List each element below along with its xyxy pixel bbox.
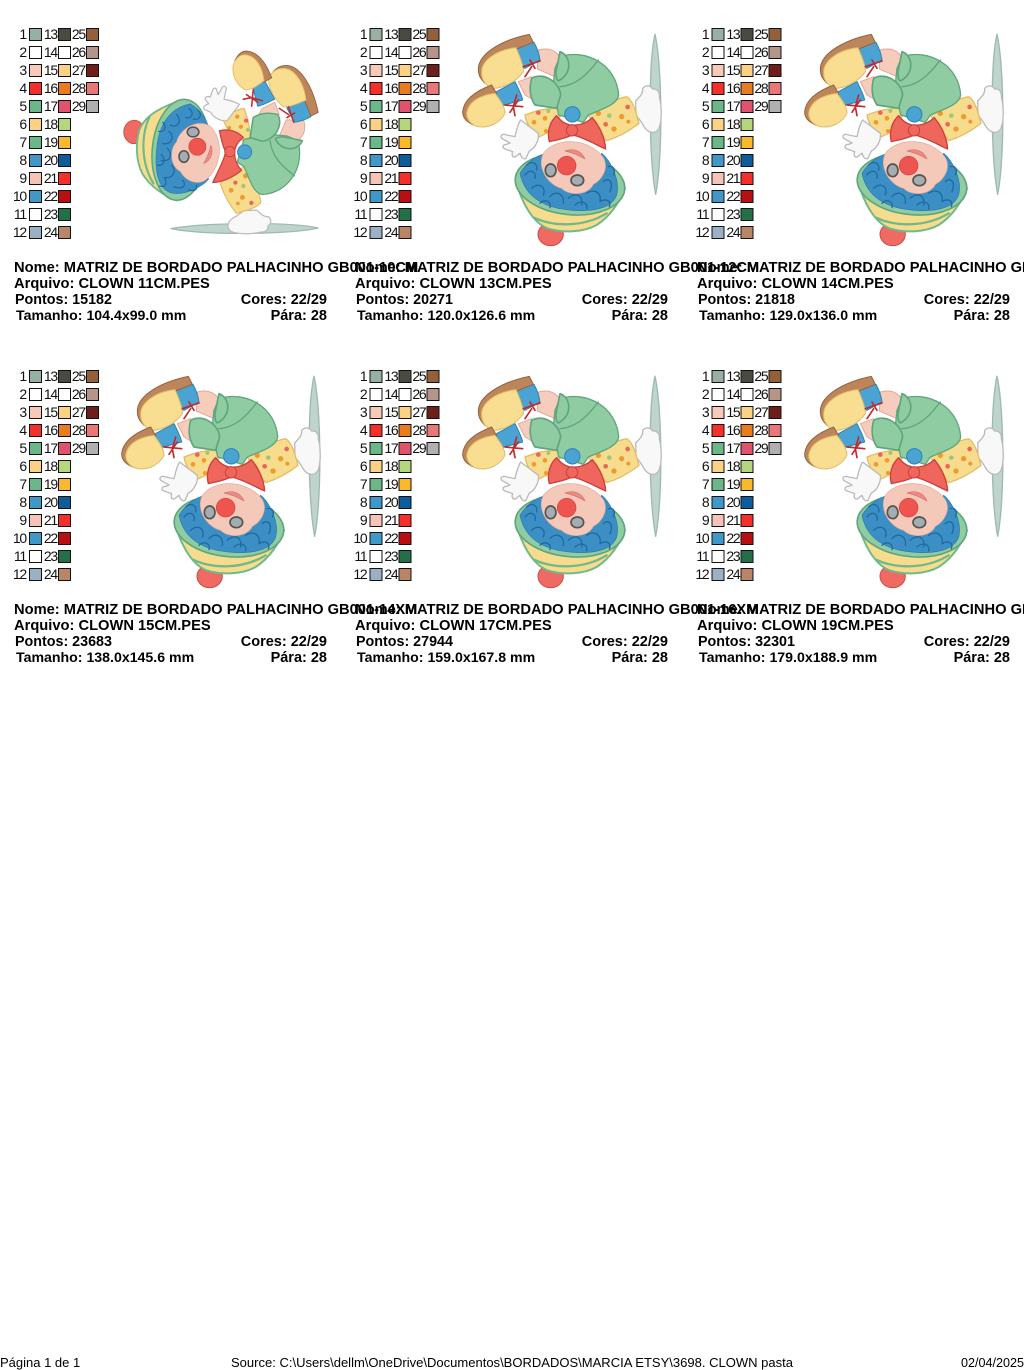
color legend: 9 [19, 512, 27, 528]
color legend: 27 [412, 404, 427, 420]
color legend [353, 368, 439, 582]
color legend: 2 [19, 44, 27, 60]
color legend: 17 [384, 440, 399, 456]
color legend: 29 [72, 98, 86, 114]
color legend [13, 26, 98, 240]
color legend: 23 [384, 206, 399, 222]
design info: Pontos: 27944 [356, 634, 453, 650]
color legend: 29 [72, 440, 86, 456]
color legend: 28 [412, 422, 427, 438]
design info: Nome: MATRIZ DE BORDADO PALHACINHO GB001-14XM [14, 602, 417, 618]
color legend [353, 26, 439, 240]
color legend: 2 [702, 44, 710, 60]
color legend: 20 [726, 494, 741, 510]
color legend: 15 [384, 62, 399, 78]
color legend: 23 [44, 206, 58, 222]
color legend: 19 [726, 476, 741, 492]
design info: Arquivo: CLOWN 19CM.PES [697, 618, 894, 634]
color legend: 22 [384, 530, 399, 546]
color legend: 16 [384, 422, 399, 438]
color legend: 9 [360, 170, 368, 186]
color legend: 29 [412, 98, 427, 114]
panel: clown 13cm [353, 26, 759, 324]
design info: Cores: 22/29 [924, 292, 1010, 308]
color legend: 15 [44, 62, 58, 78]
design info: Arquivo: CLOWN 14CM.PES [697, 276, 894, 292]
design info: Cores: 22/29 [241, 634, 327, 650]
color legend: 7 [19, 134, 27, 150]
color legend: 11 [354, 206, 368, 222]
color legend: 13 [384, 368, 399, 384]
color legend: 8 [19, 152, 27, 168]
design info: Cores: 22/29 [924, 634, 1010, 650]
color legend: 19 [44, 476, 58, 492]
color legend: 6 [702, 458, 710, 474]
design info: Cores: 22/29 [582, 634, 668, 650]
color legend: 16 [726, 422, 741, 438]
color legend: 20 [384, 494, 399, 510]
color legend: 10 [695, 530, 710, 546]
color legend: 2 [360, 386, 368, 402]
color legend: 25 [412, 26, 427, 42]
design info: Pára: 28 [612, 308, 668, 324]
color legend: 18 [384, 458, 399, 474]
color legend: 11 [696, 548, 710, 564]
clown embroidery rotated [124, 51, 318, 234]
color legend: 26 [754, 44, 769, 60]
color legend: 17 [726, 98, 741, 114]
color legend: 7 [360, 134, 368, 150]
design info: Tamanho: 129.0x136.0 mm [699, 307, 877, 323]
color legend: 25 [72, 368, 86, 384]
design info [355, 602, 758, 666]
color legend: 19 [384, 476, 399, 492]
color legend: 15 [44, 404, 58, 420]
color legend: 10 [695, 188, 710, 204]
color legend: 13 [726, 26, 741, 42]
page number: Página 1 de 1 [0, 1355, 80, 1370]
design info: Pára: 28 [954, 308, 1010, 324]
clown embroidery [805, 376, 1003, 588]
color legend: 9 [702, 170, 710, 186]
color legend: 27 [754, 62, 769, 78]
color legend: 9 [360, 512, 368, 528]
color legend: 4 [360, 80, 368, 96]
color legend: 6 [19, 116, 27, 132]
color legend: 24 [44, 224, 58, 240]
design info [14, 602, 417, 666]
color legend: 7 [19, 476, 27, 492]
design info: Pára: 28 [271, 650, 327, 666]
color legend: 4 [360, 422, 368, 438]
color legend: 24 [726, 566, 741, 582]
design info [355, 260, 759, 324]
source path: Source: C:\Users\dellm\OneDrive\Documentos\BORDADOS\MARCIA ETSY\3698. CLOWN pasta [231, 1355, 794, 1370]
color legend: 4 [702, 422, 710, 438]
color legend: 7 [702, 476, 710, 492]
color legend: 16 [44, 422, 58, 438]
design info: Nome: MATRIZ DE BORDADO PALHACINHO GB001-16XM [355, 602, 758, 618]
color legend: 5 [360, 440, 368, 456]
color legend: 14 [726, 386, 741, 402]
color legend: 26 [412, 386, 427, 402]
color legend: 13 [44, 26, 58, 42]
color legend: 17 [44, 440, 58, 456]
design info: Pára: 28 [612, 650, 668, 666]
color legend: 18 [44, 116, 58, 132]
color legend: 20 [44, 494, 58, 510]
color legend: 10 [353, 530, 368, 546]
color legend: 9 [19, 170, 27, 186]
color legend: 15 [384, 404, 399, 420]
color legend: 1 [19, 368, 27, 384]
color legend: 6 [360, 458, 368, 474]
color legend: 27 [72, 62, 86, 78]
design info [697, 260, 1024, 324]
design info: Pontos: 23683 [15, 634, 112, 650]
color legend: 18 [726, 458, 741, 474]
color legend: 4 [19, 80, 27, 96]
color legend: 22 [44, 530, 58, 546]
color legend: 28 [72, 422, 86, 438]
design info: Pontos: 15182 [15, 292, 112, 308]
color legend: 18 [726, 116, 741, 132]
color legend: 20 [384, 152, 399, 168]
color legend: 12 [13, 566, 27, 582]
color legend: 20 [44, 152, 58, 168]
color legend: 3 [19, 62, 27, 78]
color legend: 26 [412, 44, 427, 60]
panel: clown 17cm [353, 368, 758, 666]
color legend: 16 [384, 80, 399, 96]
color legend: 4 [19, 422, 27, 438]
color legend: 21 [44, 170, 58, 186]
color legend [695, 26, 781, 240]
color legend: 12 [353, 566, 368, 582]
color legend [695, 368, 781, 582]
design info [697, 602, 1024, 666]
color legend: 3 [360, 404, 368, 420]
design info: Tamanho: 104.4x99.0 mm [16, 307, 186, 323]
color legend: 22 [726, 530, 741, 546]
color legend: 7 [360, 476, 368, 492]
design info: Nome: MATRIZ DE BORDADO PALHACINHO GB001-12CM [355, 260, 759, 276]
color legend: 5 [702, 98, 710, 114]
color legend: 13 [384, 26, 399, 42]
color legend: 15 [726, 62, 741, 78]
color legend: 6 [360, 116, 368, 132]
design info: Tamanho: 138.0x145.6 mm [16, 649, 194, 665]
color legend: 17 [384, 98, 399, 114]
color legend: 22 [384, 188, 399, 204]
color legend: 24 [384, 566, 399, 582]
panel: clown 15cm [13, 368, 417, 666]
color legend: 23 [726, 548, 741, 564]
color legend: 8 [702, 152, 710, 168]
color legend: 5 [702, 440, 710, 456]
color legend [13, 368, 98, 582]
color legend: 16 [726, 80, 741, 96]
color legend: 22 [44, 188, 58, 204]
color legend: 22 [726, 188, 741, 204]
color legend: 6 [702, 116, 710, 132]
design info [14, 260, 418, 324]
color legend: 8 [360, 152, 368, 168]
color legend: 5 [360, 98, 368, 114]
color legend: 1 [19, 26, 27, 42]
color legend: 8 [702, 494, 710, 510]
color legend: 3 [19, 404, 27, 420]
color legend: 23 [726, 206, 741, 222]
design info: Arquivo: CLOWN 17CM.PES [355, 618, 552, 634]
color legend: 27 [412, 62, 427, 78]
color legend: 10 [353, 188, 368, 204]
clown embroidery [463, 376, 661, 588]
color legend: 29 [412, 440, 427, 456]
color legend: 25 [412, 368, 427, 384]
color legend: 21 [44, 512, 58, 528]
color legend: 12 [13, 224, 27, 240]
color legend: 28 [72, 80, 86, 96]
color legend: 13 [726, 368, 741, 384]
color legend: 9 [702, 512, 710, 528]
color legend: 11 [354, 548, 368, 564]
color legend: 2 [360, 44, 368, 60]
color legend: 28 [412, 80, 427, 96]
color legend: 26 [754, 386, 769, 402]
color legend: 25 [754, 26, 769, 42]
color legend: 17 [726, 440, 741, 456]
color legend: 8 [360, 494, 368, 510]
clown embroidery [805, 34, 1003, 246]
color legend: 1 [702, 368, 710, 384]
color legend: 8 [19, 494, 27, 510]
color legend: 21 [726, 170, 741, 186]
color legend: 11 [696, 206, 710, 222]
design info: Pára: 28 [271, 308, 327, 324]
design info: Pára: 28 [954, 650, 1010, 666]
color legend: 7 [702, 134, 710, 150]
color legend: 27 [754, 404, 769, 420]
color legend: 14 [726, 44, 741, 60]
design info: Nome: MATRIZ DE BORDADO PALHACINHO GB001-10CM [14, 260, 418, 276]
color legend: 6 [19, 458, 27, 474]
design info: Tamanho: 179.0x188.9 mm [699, 649, 877, 665]
color legend: 18 [384, 116, 399, 132]
color legend: 16 [44, 80, 58, 96]
color legend: 12 [695, 224, 710, 240]
design info: Arquivo: CLOWN 11CM.PES [14, 276, 210, 292]
color legend: 5 [19, 98, 27, 114]
color legend: 21 [384, 512, 399, 528]
color legend: 24 [384, 224, 399, 240]
color legend: 3 [702, 62, 710, 78]
color legend: 23 [44, 548, 58, 564]
color legend: 21 [726, 512, 741, 528]
color legend: 3 [360, 62, 368, 78]
color legend: 4 [702, 80, 710, 96]
color legend: 11 [14, 548, 27, 564]
color legend: 10 [13, 530, 27, 546]
color legend: 14 [44, 44, 58, 60]
clown embroidery [122, 376, 320, 588]
design info: Pontos: 21818 [698, 292, 795, 308]
design info: Tamanho: 159.0x167.8 mm [357, 649, 535, 665]
color legend: 23 [384, 548, 399, 564]
color legend: 27 [72, 404, 86, 420]
color legend: 1 [360, 368, 368, 384]
color legend: 17 [44, 98, 58, 114]
color legend: 21 [384, 170, 399, 186]
design info: Tamanho: 120.0x126.6 mm [357, 307, 535, 323]
color legend: 24 [726, 224, 741, 240]
color legend: 28 [754, 422, 769, 438]
color legend: 14 [384, 386, 399, 402]
color legend: 11 [14, 206, 27, 222]
design info: Arquivo: CLOWN 13CM.PES [355, 276, 552, 292]
design info: Cores: 22/29 [582, 292, 668, 308]
color legend: 20 [726, 152, 741, 168]
color legend: 1 [702, 26, 710, 42]
panel: clown 19cm [695, 368, 1024, 666]
color legend: 19 [726, 134, 741, 150]
color legend: 24 [44, 566, 58, 582]
panel: clown 14cm [695, 26, 1024, 324]
design info: Arquivo: CLOWN 15CM.PES [14, 618, 211, 634]
color legend: 26 [72, 386, 86, 402]
color legend: 29 [754, 98, 769, 114]
color legend: 1 [360, 26, 368, 42]
color legend: 2 [19, 386, 27, 402]
color legend: 28 [754, 80, 769, 96]
color legend: 3 [702, 404, 710, 420]
design info: Pontos: 32301 [698, 634, 795, 650]
color legend: 12 [353, 224, 368, 240]
panel: clown 11cm [13, 26, 418, 324]
color legend: 2 [702, 386, 710, 402]
color legend: 19 [44, 134, 58, 150]
color legend: 14 [384, 44, 399, 60]
color legend: 18 [44, 458, 58, 474]
color legend: 29 [754, 440, 769, 456]
footer [0, 1355, 1024, 1370]
design info: Pontos: 20271 [356, 292, 453, 308]
color legend: 10 [13, 188, 27, 204]
color legend: 14 [44, 386, 58, 402]
color legend: 26 [72, 44, 86, 60]
color legend: 15 [726, 404, 741, 420]
color legend: 12 [695, 566, 710, 582]
color legend: 25 [72, 26, 86, 42]
clown embroidery [463, 34, 661, 246]
color legend: 19 [384, 134, 399, 150]
color legend: 13 [44, 368, 58, 384]
color legend: 5 [19, 440, 27, 456]
color legend: 25 [754, 368, 769, 384]
design info: Cores: 22/29 [241, 292, 327, 308]
